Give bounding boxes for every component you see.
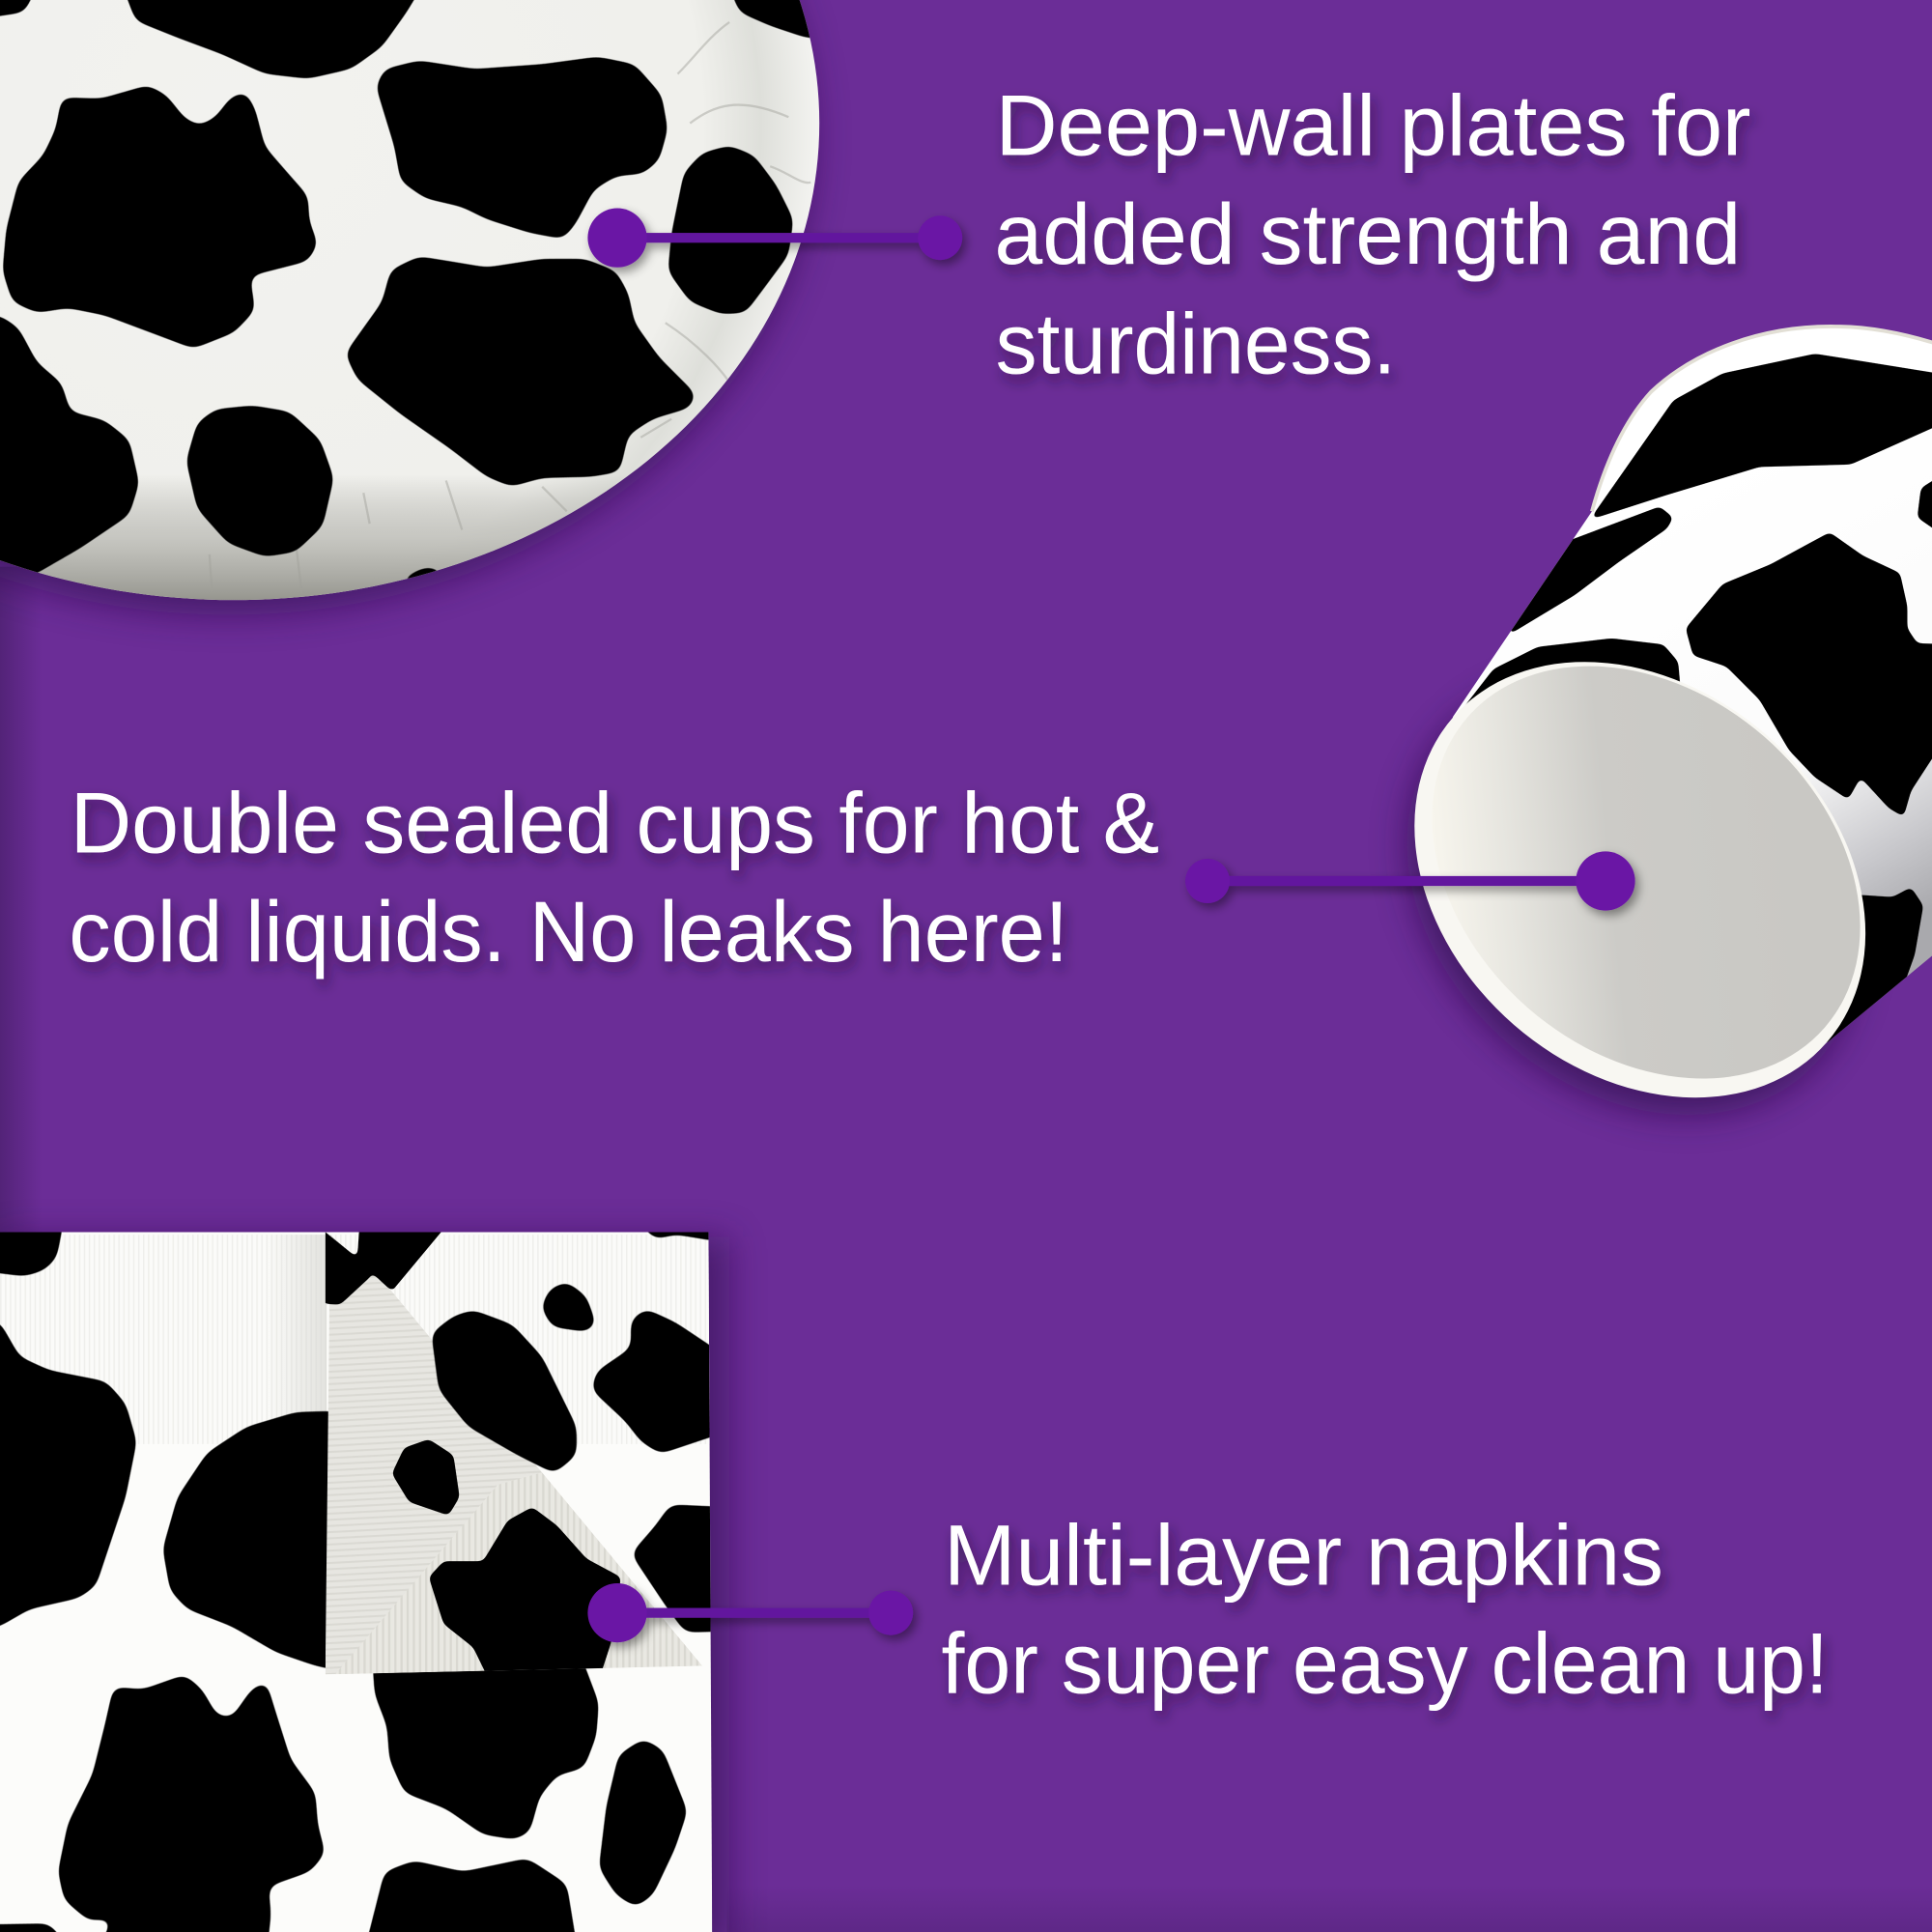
text: plates: sturdiness. (996, 295, 1396, 391)
flap cow spots (318, 1220, 621, 1688)
plate drop shadow (0, 0, 814, 614)
flap inner pleat (335, 1472, 702, 1674)
plate cow spots (0, 0, 832, 586)
plate (0, 0, 832, 610)
text: cups: cold liquids. No leaks here! (69, 883, 1068, 980)
callout line: plate (587, 209, 962, 268)
text: cups: Double sealed cups for hot & (71, 775, 1159, 871)
cup line end dot (1185, 859, 1230, 903)
text: plates: added strength and (994, 185, 1741, 282)
cup dot (1576, 851, 1635, 911)
napkin line end dot (868, 1591, 913, 1635)
text: cups (69, 775, 1159, 980)
text: plates: Deep-wall plates for (996, 77, 1750, 174)
text: napkins (941, 1506, 1829, 1712)
cup base inner disc (1350, 582, 1932, 1163)
napkin drop shadow (0, 1237, 729, 1932)
cup base outer rim (1327, 572, 1932, 1187)
callout line: napkin (587, 1583, 913, 1642)
napkin cow spots (0, 1220, 727, 1932)
napkin fold shading (284, 1235, 327, 1414)
napkin fold flap (318, 1220, 702, 1688)
cup rim edge (1592, 327, 1932, 511)
napkin (0, 1220, 727, 1932)
cup cow spots (1430, 354, 1932, 1060)
napkin dot (587, 1583, 647, 1642)
text: napkins: Multi-layer napkins (944, 1506, 1663, 1603)
text: napkins: for super easy clean up! (941, 1615, 1829, 1712)
plate dot (587, 209, 647, 268)
napkin ribbed upper band (0, 1235, 715, 1444)
cup drop shadow (1320, 589, 1932, 1205)
text: plates (994, 77, 1750, 391)
plate line end dot (918, 215, 962, 260)
cup (1414, 325, 1932, 1097)
large teardrop spot across fold (431, 1310, 577, 1474)
callout line: cup (1185, 851, 1635, 911)
plate rim creases (210, 22, 810, 594)
cup body (1453, 327, 1932, 1042)
